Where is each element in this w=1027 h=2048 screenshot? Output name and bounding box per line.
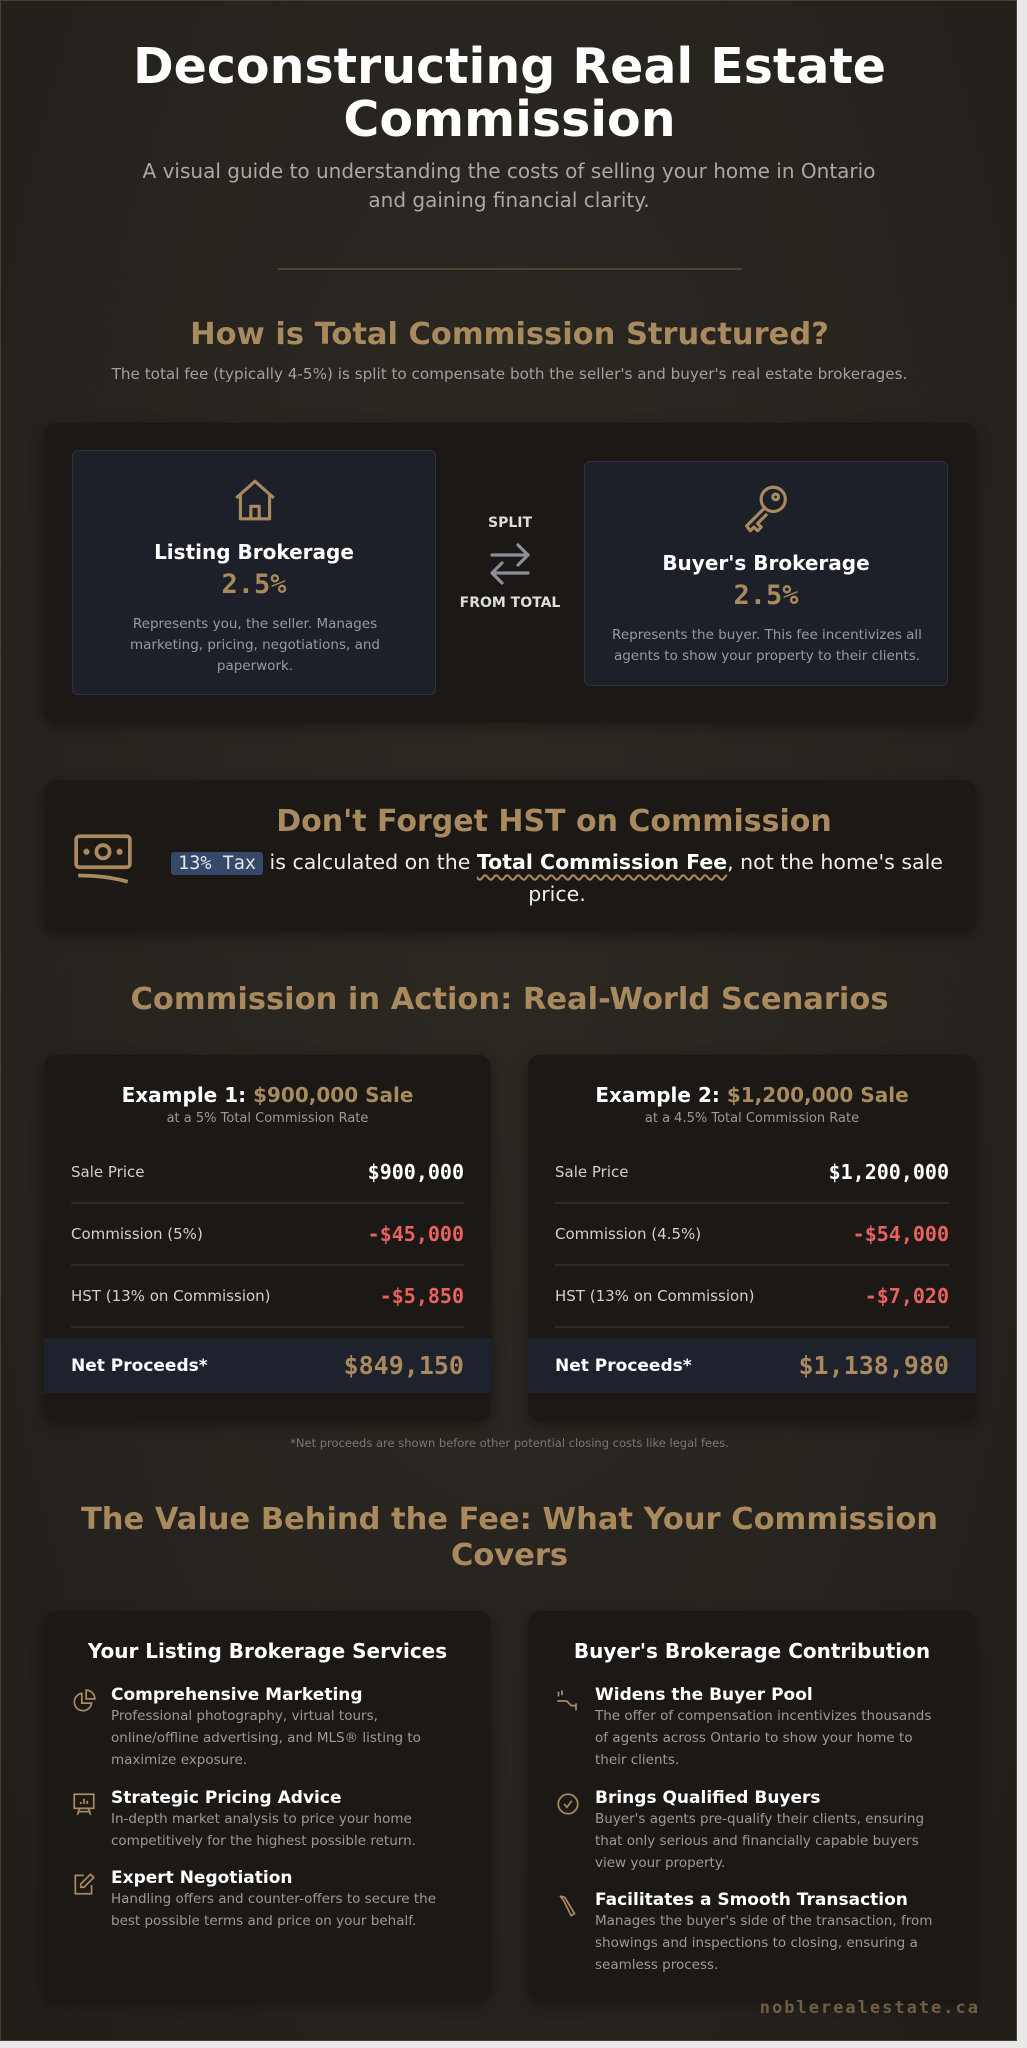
panel: example 2: HST (13% on Commission) [555, 1287, 755, 1305]
item: qualified buyers [557, 1788, 924, 1871]
item: qualified buyers: Brings Qualified Buyers [595, 1788, 821, 1808]
heading: commission structure: How is Total Commission Structured? [190, 317, 829, 352]
panel: example 1: HST (13% on Commission) [71, 1287, 271, 1305]
panel: example 1: -$5,850 [380, 1284, 464, 1308]
intro text: The total fee (typically 4-5%) is split to compensate both the seller's and buyer's real estate brokerages. [112, 365, 907, 383]
icon: arrows [490, 543, 530, 585]
panel: example 1: -$45,000 [368, 1222, 464, 1246]
panel: example 2: Net Proceeds* [555, 1356, 692, 1376]
panel: example 1: Commission (5%) [71, 1225, 203, 1243]
item: buyer pool: The offer of compensation incentivizes thousands of agents across Ontario to show your home to their clients. [595, 1708, 931, 1768]
panel: example 2 [528, 1055, 976, 1421]
footnote: *Net proceeds are shown before other potential closing costs like legal fees. [290, 1436, 729, 1450]
panel: example 2: -$54,000 [853, 1222, 949, 1246]
panel: HST callout [44, 780, 976, 931]
item: smooth transaction [560, 1890, 932, 1973]
footer: website: noblerealestate.ca [760, 1998, 980, 2018]
item: marketing [74, 1685, 421, 1768]
panel: example 2: at a 4.5% Total Commission Rate [645, 1111, 859, 1126]
card: listing brokerage: Listing Brokerage [154, 540, 354, 564]
card: buyer's brokerage: Represents the buyer. This fee incentivizes all agents to show your property to their clients. [612, 627, 922, 664]
icon: key [745, 486, 787, 532]
card: listing brokerage: 2.5% [221, 569, 287, 600]
panel: listing services [44, 1611, 491, 2000]
panel: example 1: $849,150 [344, 1351, 464, 1380]
panel: example 1: at a 5% Total Commission Rate [167, 1111, 368, 1126]
item: pricing: In-depth market analysis to price your home competitively for the highest possible return. [111, 1811, 416, 1849]
item: negotiation: Expert Negotiation [111, 1868, 292, 1888]
split indicator: FROM TOTAL [460, 595, 560, 611]
panel: example 2: Sale Price [555, 1163, 628, 1181]
icon: money [74, 834, 132, 884]
card: buyer's brokerage: 2.5% [733, 580, 799, 611]
panel: example 1: $900,000 [368, 1160, 464, 1184]
item: pricing [73, 1788, 416, 1849]
panel: split [44, 423, 976, 722]
card: listing brokerage: Represents you, the seller. Manages marketing, pricing, negotiations, and paperwork. [130, 616, 380, 674]
panel: example 1: Net Proceeds* [71, 1356, 208, 1376]
panel: example 1: Sale Price [71, 1163, 144, 1181]
item: negotiation [74, 1868, 436, 1929]
item: smooth transaction: Manages the buyer's side of the transaction, from showings and inspections to closing, ensuring a seamless process. [595, 1913, 932, 1973]
card: listing brokerage [72, 450, 436, 695]
card: buyer's brokerage [584, 461, 948, 686]
panel: example 2: Commission (4.5%) [555, 1225, 701, 1243]
card: buyer's brokerage: Buyer's Brokerage [662, 551, 870, 575]
split indicator [460, 515, 560, 611]
heading: value: The Value Behind the Fee: What Your Commission Covers [81, 1502, 938, 1573]
item: smooth transaction: Facilitates a Smooth Transaction [595, 1890, 908, 1910]
panel: buyer contribution [528, 1611, 976, 2000]
icon: house [235, 480, 275, 520]
item: buyer pool: Widens the Buyer Pool [595, 1685, 813, 1705]
split indicator: SPLIT [488, 515, 532, 531]
panel: buyer contribution: Buyer's Brokerage Contribution [574, 1639, 930, 1663]
title: Commission [343, 91, 676, 148]
HST text: 13% Tax is calculated on the Total Commission Fee, not the home's sale price. [178, 850, 943, 906]
panel: listing services: Your Listing Brokerage Services [88, 1639, 447, 1663]
item: marketing: Professional photography, virtual tours, online/offline advertising, and MLS® listing to maximize exposure. [111, 1708, 421, 1768]
panel: example 2: $1,200,000 [829, 1160, 949, 1184]
item: marketing: Comprehensive Marketing [111, 1685, 363, 1705]
item: pricing: Strategic Pricing Advice [111, 1788, 341, 1808]
HST heading: Don't Forget HST on Commission [276, 804, 832, 839]
panel: example 1 [44, 1055, 491, 1421]
subtitle: A visual guide to understanding the costs of selling your home in Ontario and gaining financial clarity. [143, 159, 875, 212]
heading: scenarios: Commission in Action: Real-World Scenarios [130, 982, 888, 1017]
panel: example 2: Example 2: $1,200,000 Sale [595, 1083, 909, 1107]
panel: example 2: -$7,020 [865, 1284, 949, 1308]
title [133, 38, 886, 148]
item: buyer pool [557, 1685, 931, 1768]
item: negotiation: Handling offers and counter-offers to secure the best possible terms and price on your behalf. [111, 1891, 436, 1929]
title: Deconstructing Real Estate [133, 38, 886, 95]
panel: example 2: $1,138,980 [798, 1351, 949, 1380]
panel: example 1: Example 1: $900,000 Sale [122, 1083, 413, 1107]
item: qualified buyers: Buyer's agents pre-qualify their clients, ensuring that only serious and financially capable buyers view your property. [595, 1811, 924, 1871]
